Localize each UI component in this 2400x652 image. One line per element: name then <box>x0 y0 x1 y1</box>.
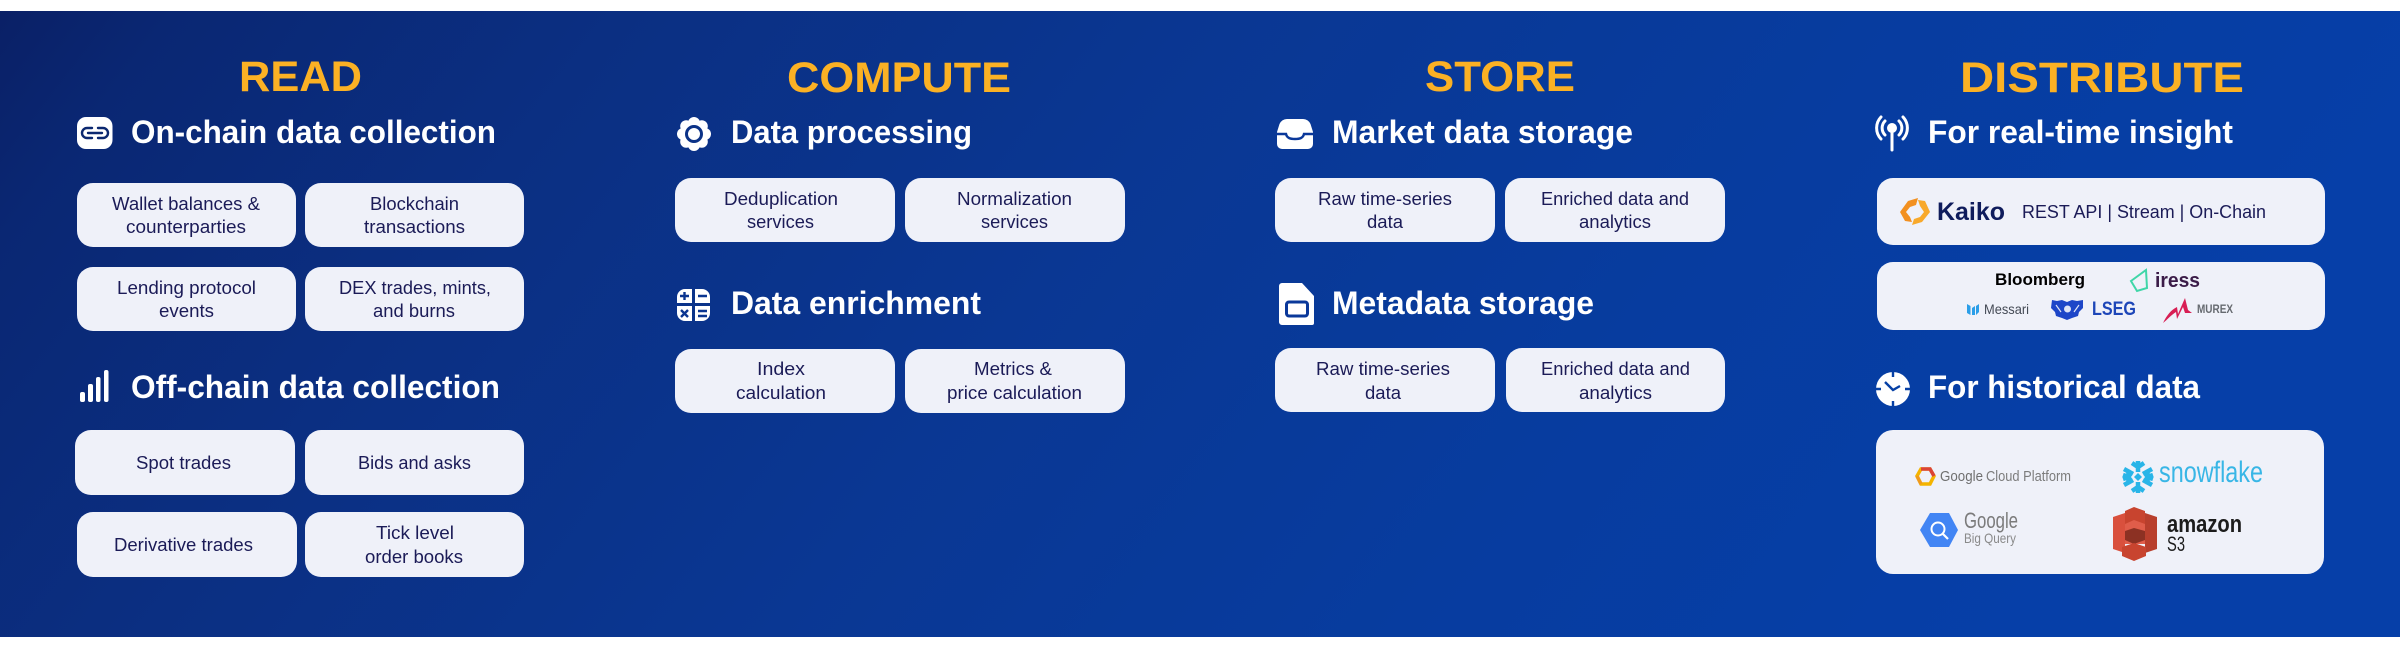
heading: STORE: STORE <box>1425 53 1575 101</box>
card: real-time partners <box>1877 262 2325 330</box>
card: enriched data <box>1505 178 1725 242</box>
card: normalization <box>905 178 1125 242</box>
card: deduplication: Deduplication <box>724 188 838 209</box>
card: blockchain transactions <box>305 183 524 247</box>
logo: google cloud platform <box>1917 468 2071 485</box>
card: wallet balances: counterparties <box>126 216 246 237</box>
logo: google cloud platform: Cloud Platform <box>1986 468 2071 485</box>
icon: antenna <box>1877 117 1907 150</box>
card: enriched data 2: Enriched data and <box>1541 358 1690 379</box>
icon: signal bars <box>80 370 108 402</box>
subheading: off-chain: Off-chain data collection <box>131 369 500 405</box>
card: bids and asks: Bids and asks <box>358 452 471 473</box>
card: derivative trades: Derivative trades <box>114 534 253 555</box>
card: blockchain transactions: Blockchain <box>370 193 459 214</box>
logo: murex: MUREX <box>2197 302 2233 316</box>
heading: READ: READ <box>239 53 362 101</box>
logo: google bigquery: Big Query <box>1964 530 2016 546</box>
logo: snowflake <box>2123 456 2263 493</box>
logo: iress <box>2131 270 2200 292</box>
panel: store <box>1275 53 1725 412</box>
card: historical partners <box>1876 430 2324 574</box>
card: spot trades: Spot trades <box>136 452 231 473</box>
logo: messari: Messari <box>1984 301 2029 317</box>
panel: read <box>75 53 524 577</box>
card: deduplication <box>675 178 895 242</box>
card: dex trades: and burns <box>373 300 455 321</box>
card: enriched data: Enriched data and <box>1541 188 1689 209</box>
icon: clock <box>1876 372 1910 406</box>
card: wallet balances <box>77 183 296 247</box>
subheading: data enrichment: Data enrichment <box>731 285 981 321</box>
card: raw time-series 2: Raw time-series <box>1316 358 1450 379</box>
card: dex trades <box>305 267 524 331</box>
logo: amazon s3 <box>2113 507 2242 561</box>
panel: compute <box>675 54 1125 413</box>
heading: COMPUTE: COMPUTE <box>787 54 1011 102</box>
icon: link <box>77 117 112 149</box>
logo: google bigquery: Google <box>1964 508 2018 533</box>
card: raw time-series: data <box>1367 211 1404 232</box>
card: bids and asks <box>305 430 524 495</box>
card: tick level order books: Tick level <box>376 522 454 543</box>
logo: iress: iress <box>2155 270 2200 292</box>
card: enriched data: analytics <box>1579 211 1651 232</box>
subheading: market data storage: Market data storage <box>1332 114 1633 150</box>
card: metrics and price calculation: Metrics & <box>974 358 1053 379</box>
card: spot trades <box>75 430 295 495</box>
logo: snowflake: snowflake <box>2159 456 2263 489</box>
logo: murex <box>2163 298 2233 323</box>
card: metrics and price calculation <box>905 349 1125 413</box>
card: deduplication: services <box>747 211 814 232</box>
card: raw time-series: Raw time-series <box>1318 188 1452 209</box>
text: products: REST API | Stream | On-Chain <box>2022 201 2266 222</box>
icon: inbox <box>1277 119 1313 149</box>
logo: lseg <box>2051 299 2136 320</box>
card: tick level order books: order books <box>365 546 463 567</box>
subheading: historical data: For historical data <box>1928 369 2200 405</box>
card: metrics and price calculation: price calculation <box>947 382 1082 403</box>
card: enriched data 2: analytics <box>1579 382 1652 403</box>
card: wallet balances: Wallet balances & <box>112 193 261 214</box>
logo: kaiko mark <box>1900 198 1930 225</box>
heading: DISTRIBUTE: DISTRIBUTE <box>1960 54 2244 102</box>
card: lending protocol: events <box>159 300 214 321</box>
subheading: data processing: Data processing <box>731 114 972 150</box>
logo: kaiko wordmark: Kaiko <box>1937 198 2005 226</box>
card: lending protocol: Lending protocol <box>117 277 256 298</box>
card: raw time-series 2: data <box>1365 382 1402 403</box>
subheading: metadata storage: Metadata storage <box>1332 285 1594 321</box>
subheading: real-time insight: For real-time insight <box>1928 114 2233 150</box>
card: dex trades: DEX trades, mints, <box>339 277 491 298</box>
card: raw time-series 2 <box>1275 348 1495 412</box>
card: raw time-series <box>1275 178 1495 242</box>
logo: messari <box>1967 301 2029 317</box>
icon: sim card file <box>1279 283 1314 325</box>
icon: calculator <box>677 289 710 321</box>
card: normalization: Normalization <box>957 188 1072 209</box>
logo: google cloud platform: Google <box>1940 468 1983 485</box>
card: tick level order books <box>305 512 524 577</box>
card: kaiko <box>1877 178 2325 245</box>
icon: gear <box>677 117 711 151</box>
logo: lseg: LSEG <box>2092 299 2136 320</box>
logo: amazon s3: S3 <box>2167 533 2185 556</box>
card: index calculation <box>675 349 895 413</box>
logo: google bigquery <box>1920 508 2018 547</box>
card: index calculation: Index <box>757 358 806 379</box>
card: index calculation: calculation <box>736 382 826 403</box>
card: lending protocol <box>77 267 296 331</box>
panel: distribute <box>1876 54 2325 574</box>
card: blockchain transactions: transactions <box>364 216 465 237</box>
logo: bloomberg: Bloomberg <box>1995 270 2085 289</box>
card: enriched data 2 <box>1506 348 1725 412</box>
card: derivative trades <box>77 512 297 577</box>
subheading: on-chain: On-chain data collection <box>131 114 496 150</box>
logo: amazon s3: amazon <box>2167 511 2242 538</box>
card: normalization: services <box>981 211 1048 232</box>
